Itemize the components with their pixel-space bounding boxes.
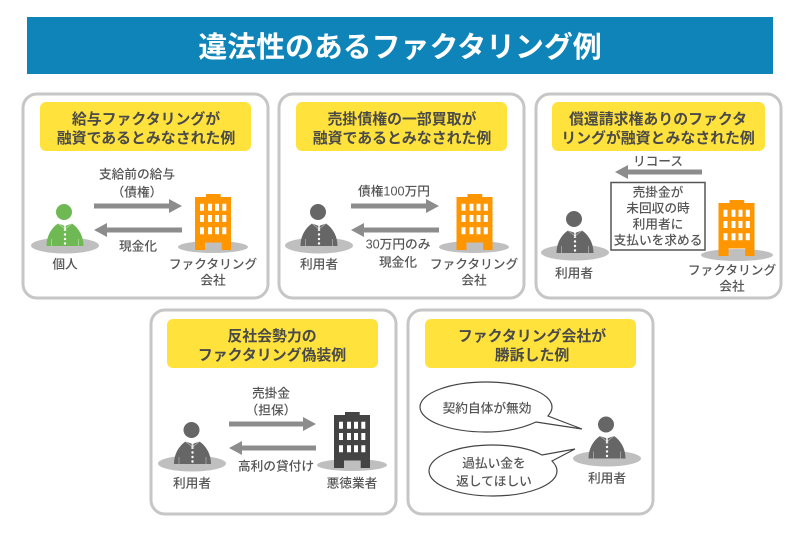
- label: recourse: リコース: [633, 154, 683, 168]
- label: collateral: [246, 386, 296, 418]
- heading: recourse: 償還請求権ありのファクタ: [569, 110, 747, 128]
- label: receivable: （債権）: [112, 184, 162, 200]
- label: loan: 高利の貸付け: [238, 458, 314, 474]
- icon: user: [573, 416, 641, 466]
- icon: user: [158, 422, 226, 472]
- heading: company won: 勝訴した例: [495, 346, 569, 364]
- icon: individual: [31, 204, 99, 254]
- label: user: 利用者: [588, 472, 626, 486]
- label: company: ファクタリング: [430, 256, 518, 272]
- arrow: recourse: [615, 165, 702, 179]
- panel: disguised factoring: [151, 310, 396, 514]
- heading: salary factoring: [40, 102, 251, 151]
- heading: partial purchase: 融資であるとみなされた例: [313, 129, 491, 147]
- callout: payment demand: 売掛金が: [633, 184, 684, 200]
- label: collateral: （担保）: [246, 404, 296, 418]
- label: cash amount: [366, 238, 431, 270]
- label: company: 会社: [461, 274, 487, 288]
- label: company: [169, 256, 257, 288]
- label: company: [688, 262, 776, 294]
- heading: disguised factoring: [167, 319, 378, 368]
- icon: factoring company: [178, 194, 248, 253]
- heading: partial purchase: [296, 102, 507, 151]
- callout: refund request: [429, 445, 575, 496]
- arrow: cash: [351, 223, 439, 237]
- label: receivable: 支給前の給与: [99, 166, 175, 182]
- label: user: 利用者: [555, 266, 593, 280]
- heading: recourse: [552, 102, 765, 151]
- panel: recourse: [536, 94, 781, 298]
- label: individual: 個人: [52, 258, 78, 272]
- heading: partial purchase: 売掛債権の一部買取が: [328, 110, 477, 128]
- heading: disguised factoring: 反社会勢力の: [227, 327, 317, 345]
- callout: payment demand: [611, 182, 705, 250]
- label: receivable: [99, 166, 175, 200]
- label: cash: 現金化: [119, 238, 157, 254]
- label: user: 利用者: [173, 476, 211, 490]
- heading: disguised factoring: ファクタリング偽装例: [198, 346, 346, 364]
- callout: payment demand: 支払いを求める: [614, 232, 702, 248]
- arrow: cash: [94, 223, 182, 237]
- callout: refund request: 過払い金を: [462, 456, 526, 470]
- heading: company won: [425, 319, 636, 368]
- heading: salary factoring: 給与ファクタリングが: [72, 110, 220, 128]
- callout: contract void: [420, 382, 582, 432]
- callout: payment demand: 利用者に: [633, 218, 683, 232]
- label: malicious company: 悪徳業者: [327, 476, 378, 490]
- icon: user: [285, 204, 353, 254]
- icon: factoring company: [701, 200, 773, 261]
- label: company: ファクタリング: [688, 262, 776, 278]
- heading: company won: ファクタリング会社が: [458, 327, 606, 345]
- panel: company won: [408, 310, 653, 514]
- icon: factoring company: [439, 194, 509, 253]
- label: company: [430, 256, 518, 288]
- callout: payment demand: 未回収の時: [626, 200, 690, 216]
- label: collateral: 売掛金: [252, 386, 290, 400]
- heading: recourse: リングが融資とみなされた例: [561, 129, 755, 147]
- label: company: 会社: [719, 280, 745, 294]
- title banner: [27, 17, 773, 74]
- heading: salary factoring: 融資であるとみなされた例: [57, 129, 235, 147]
- label: cash amount: 現金化: [379, 254, 417, 270]
- arrow: salary receivable: [94, 199, 182, 213]
- panel: partial purchase: [279, 94, 524, 298]
- label: company: 会社: [200, 274, 226, 288]
- arrow: receivable: [351, 199, 439, 213]
- title banner: 違法性のあるファクタリング例: [198, 31, 602, 64]
- label: user: 利用者: [300, 258, 338, 272]
- callout: contract void: 契約自体が無効: [443, 400, 531, 416]
- callout: refund request: 返してほしい: [456, 474, 532, 488]
- arrow: receivable collateral: [229, 417, 316, 431]
- icon: malicious company: [317, 412, 387, 471]
- label: company: ファクタリング: [169, 256, 257, 272]
- arrow: high-interest loan: [229, 441, 316, 455]
- panel: salary factoring: [23, 94, 268, 298]
- label: receivable amount: 債権100万円: [358, 184, 430, 198]
- icon: user: [541, 211, 609, 260]
- label: cash amount: 30万円のみ: [366, 238, 431, 252]
